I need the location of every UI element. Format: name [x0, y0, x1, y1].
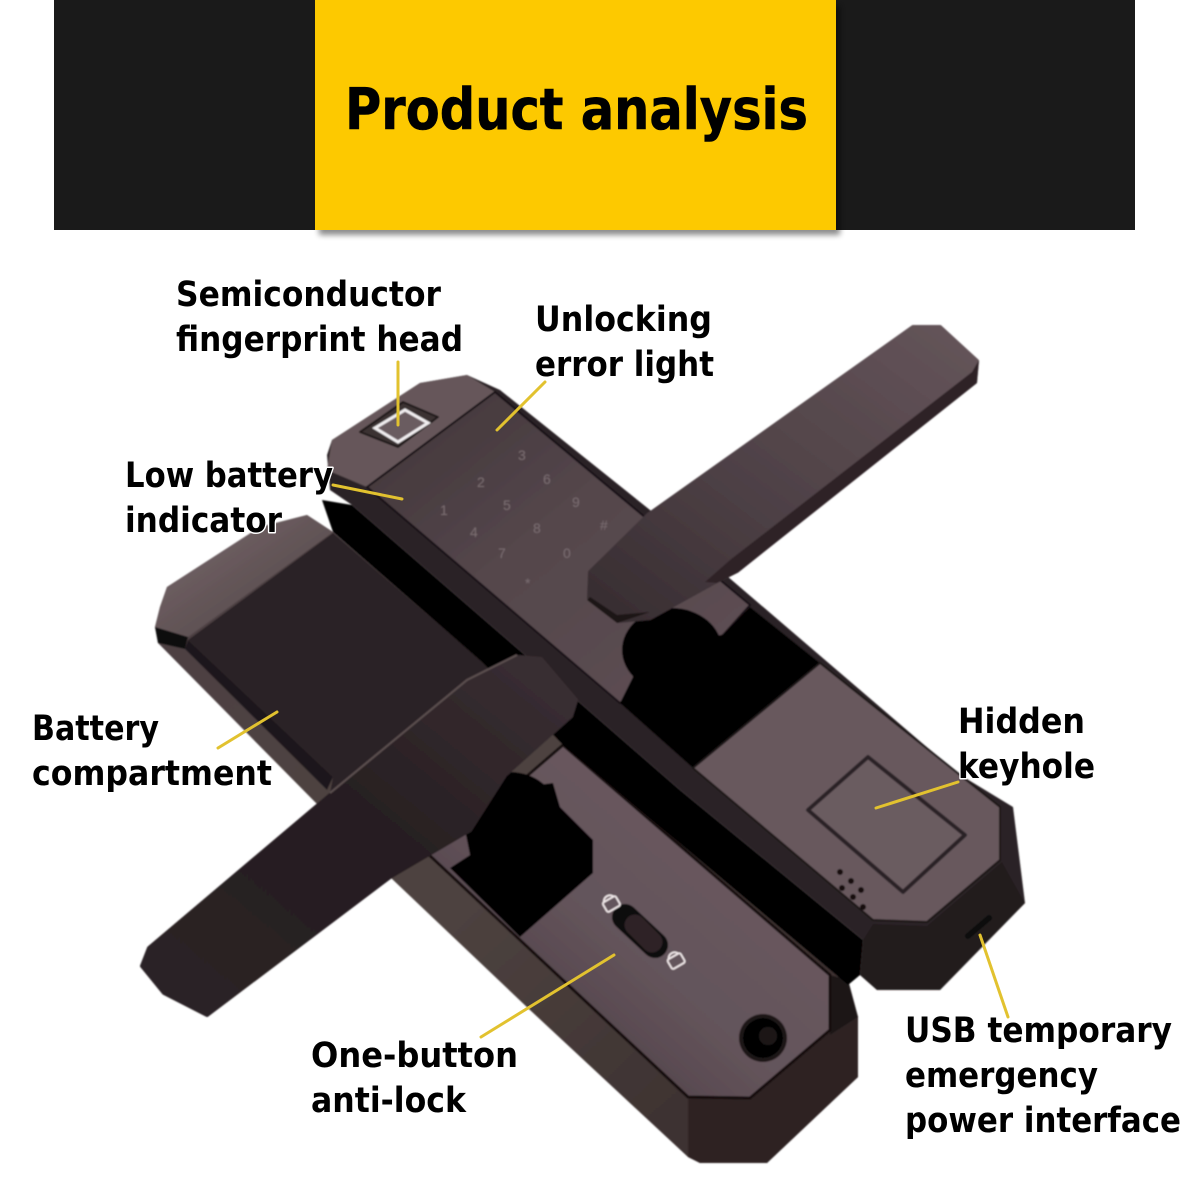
fingerprint head: [360, 402, 438, 447]
black recess under upper handle: [620, 607, 820, 768]
lower handle neck: [464, 772, 556, 848]
upper handle: [587, 327, 979, 623]
battery end bevel: [155, 515, 333, 637]
keypad digits: *: [525, 575, 531, 591]
label: low battery indicator: [125, 456, 333, 541]
label: one-button anti-lock: [311, 1036, 518, 1121]
lock icon: locked: [600, 892, 621, 913]
keypad digits: 2: [477, 474, 485, 490]
keypad digits: 6: [543, 471, 551, 487]
screw hole: [739, 1014, 787, 1062]
lower section face: [693, 663, 1000, 922]
label: one-button anti-lock: One-button: [311, 1036, 518, 1076]
label: hidden keyhole: Hidden: [958, 702, 1085, 742]
lower handle: [142, 655, 576, 1015]
keypad digits: [440, 447, 608, 591]
shadow under lower handle: [450, 783, 593, 937]
lower plate bottom end shading: [688, 1017, 858, 1163]
label: semiconductor fingerprint head: fingerprint head: [176, 320, 463, 360]
upper plate body: [327, 375, 1025, 990]
label: unlocking error light: Unlocking: [535, 300, 712, 340]
lower plate face: [427, 745, 830, 1098]
label: USB temporary emergency power interface: [905, 1011, 1181, 1141]
label: battery compartment: compartment: [32, 754, 272, 794]
keypad digits: 7: [498, 545, 506, 561]
label: low battery indicator: indicator: [125, 501, 283, 541]
label: USB temporary emergency power interface: emergency: [905, 1056, 1098, 1096]
label: battery compartment: Battery: [32, 709, 159, 749]
door lock product: [142, 327, 1025, 1163]
label: hidden keyhole: keyhole: [958, 747, 1095, 787]
label: hidden keyhole: [958, 702, 1095, 787]
keypad digits: 9: [572, 494, 580, 510]
label: USB temporary emergency power interface: USB temporary: [905, 1011, 1172, 1051]
lower plate body: [155, 515, 858, 1163]
keypad digits: 3: [518, 447, 526, 463]
keypad digits: 5: [503, 497, 511, 513]
header band: [54, 0, 1135, 235]
upper handle neck: [622, 608, 722, 692]
label: semiconductor fingerprint head: [176, 275, 463, 360]
hidden keyhole cover: [808, 757, 965, 892]
label: unlocking error light: [535, 300, 714, 385]
anti-lock slider: [625, 917, 655, 945]
keypad digits: 4: [470, 524, 478, 540]
keypad digits: 1: [440, 502, 448, 518]
keypad digits: 8: [533, 520, 541, 536]
keypad face: [367, 392, 750, 703]
keypad digits: 0: [563, 545, 571, 561]
label: low battery indicator: Low battery: [125, 456, 333, 496]
label: battery compartment: [32, 709, 272, 794]
black band between plates: [322, 500, 863, 985]
label: unlocking error light: error light: [535, 345, 714, 385]
speaker dots: [837, 869, 866, 910]
keypad digits: #: [600, 517, 608, 533]
label: semiconductor fingerprint head: Semiconductor: [176, 275, 442, 315]
upper plate top bevel: [327, 375, 495, 487]
label: one-button anti-lock: anti-lock: [311, 1081, 467, 1121]
USB port: [968, 918, 989, 936]
yellow title panel: [315, 0, 836, 230]
dark underside of upper plate end: [860, 862, 1025, 990]
yellow title panel shadow: [319, 6, 840, 235]
battery compartment cover: [188, 533, 520, 793]
callout lines: [218, 362, 1008, 1037]
title: Product analysis: [345, 77, 808, 143]
lock icon: unlocked: [665, 949, 685, 970]
